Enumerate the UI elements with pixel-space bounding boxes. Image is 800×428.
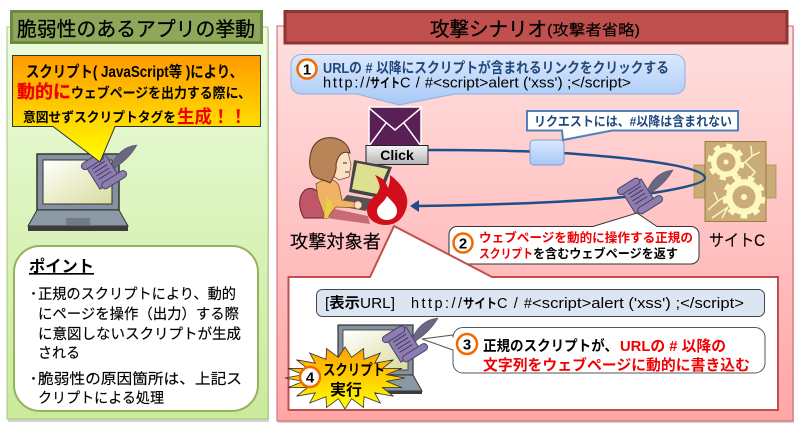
- label: attack target: 攻撃対象者: [290, 232, 381, 252]
- heading: attack scenario: 攻撃シナリオ: [430, 18, 547, 41]
- callout: request excludes fragment: リクエストには、#以降は含まれない: [534, 114, 732, 129]
- callout: step 3 script writes fragment: 文字列をウェブページに動的に書き込む: [483, 356, 750, 374]
- panel: point: クリプトによる処理: [38, 390, 164, 407]
- panel: point: される: [38, 345, 80, 362]
- panel: point: 正規のスクリプトにより、動的: [38, 286, 236, 303]
- icon: site C server: [694, 142, 776, 222]
- callout: step 2 legitimate script returned: ウェブページを動的に操作する正規の: [479, 230, 693, 245]
- url bar: displayed URL: サイト: [463, 296, 497, 311]
- icon: envelope: [369, 107, 421, 147]
- panel: point: にページを操作（出力）する際: [38, 306, 239, 323]
- callout: step 2 legitimate script returned: を含むウェブページを返す: [533, 246, 678, 261]
- button: click: [366, 146, 428, 164]
- url bar: displayed URL: http://: [411, 296, 463, 312]
- panel: point: に意図しないスクリプトが生成: [38, 326, 241, 343]
- callout: step 2 legitimate script returned: [449, 213, 699, 264]
- label: site C: サイトC: [709, 232, 765, 250]
- arrow: request and response path: [410, 150, 705, 212]
- panel: vulnerable app behaviour: [7, 12, 269, 422]
- callout: step 3 script writes fragment: 3: [463, 336, 471, 354]
- callout: script generates tag: [12, 56, 260, 162]
- panel: attack scenario: [277, 12, 794, 423]
- callout: request excludes fragment: [527, 111, 738, 140]
- icon: laptop with script: [338, 318, 438, 394]
- callout: step 1 click link: C/#: [400, 76, 433, 92]
- icon: flame: [367, 175, 407, 225]
- url bar: displayed URL: C/#: [497, 296, 532, 312]
- callout: step 1 click link: サイト: [370, 76, 400, 90]
- heading: attack scenario: (攻撃者省略): [547, 22, 640, 39]
- url bar: displayed URL: <script>alert ('xss') ;</script>: [532, 296, 744, 312]
- callout: step 3 script writes fragment: URLの # 以降の: [620, 338, 726, 355]
- url bar: displayed URL: [表示URL]: [325, 294, 395, 312]
- url bar: displayed URL: [316, 290, 764, 316]
- callout: script generates tag: スクリプト( JavaScript等 )により、: [26, 62, 243, 81]
- callout: step 3 script writes fragment: [422, 328, 765, 374]
- callout: step 1 click link: URLの # 以降にスクリプトが含まれるリンクをクリックする: [323, 59, 669, 77]
- callout: step 1 click link: <script>alert ('xss') ;</script>: [433, 76, 631, 92]
- panel: point: 脆弱性の原因箇所は、上記ス: [38, 370, 242, 388]
- heading: attack scenario: [285, 12, 787, 43]
- callout: step 1 click link: http://: [323, 76, 371, 92]
- callout: script generates tag: 意図せずスクリプトタグを: [23, 109, 176, 125]
- icon: starburst script execution: 実行: [330, 381, 362, 399]
- callout: step 2 legitimate script returned: 2: [459, 236, 467, 252]
- panel: point: ･: [30, 286, 37, 302]
- panel: point: ポイント: [29, 256, 94, 276]
- callout: script generates tag: 生成！！: [177, 106, 247, 127]
- icon: script on response path: [616, 170, 673, 219]
- callout: step 1 click link: [291, 54, 685, 105]
- panel: browser display zoom: [285, 226, 778, 410]
- icon: starburst script execution: 4: [306, 370, 315, 386]
- callout: step 2 legitimate script returned: スクリプト: [479, 247, 533, 261]
- icon: starburst script execution: スクリプト: [323, 362, 385, 379]
- icon: starburst script execution: [285, 347, 405, 409]
- callout: script generates tag: ウェブページを出力する際に、: [71, 85, 251, 101]
- callout: script generates tag: 動的に: [17, 82, 71, 102]
- callout: step 3 script writes fragment: 正規のスクリプトが、: [483, 337, 618, 355]
- heading: vulnerable app behaviour: 脆弱性のあるアプリの挙動: [17, 18, 255, 41]
- icon: laptop with script: [28, 145, 137, 231]
- panel: point: [14, 246, 258, 411]
- heading: vulnerable app behaviour: [12, 12, 262, 42]
- icon: attack target person at computer: [300, 138, 392, 224]
- icon: request packet: [530, 140, 564, 165]
- callout: step 1 click link: 1: [303, 62, 311, 78]
- button: click: Click: [380, 147, 414, 163]
- panel: point: ･: [30, 371, 37, 387]
